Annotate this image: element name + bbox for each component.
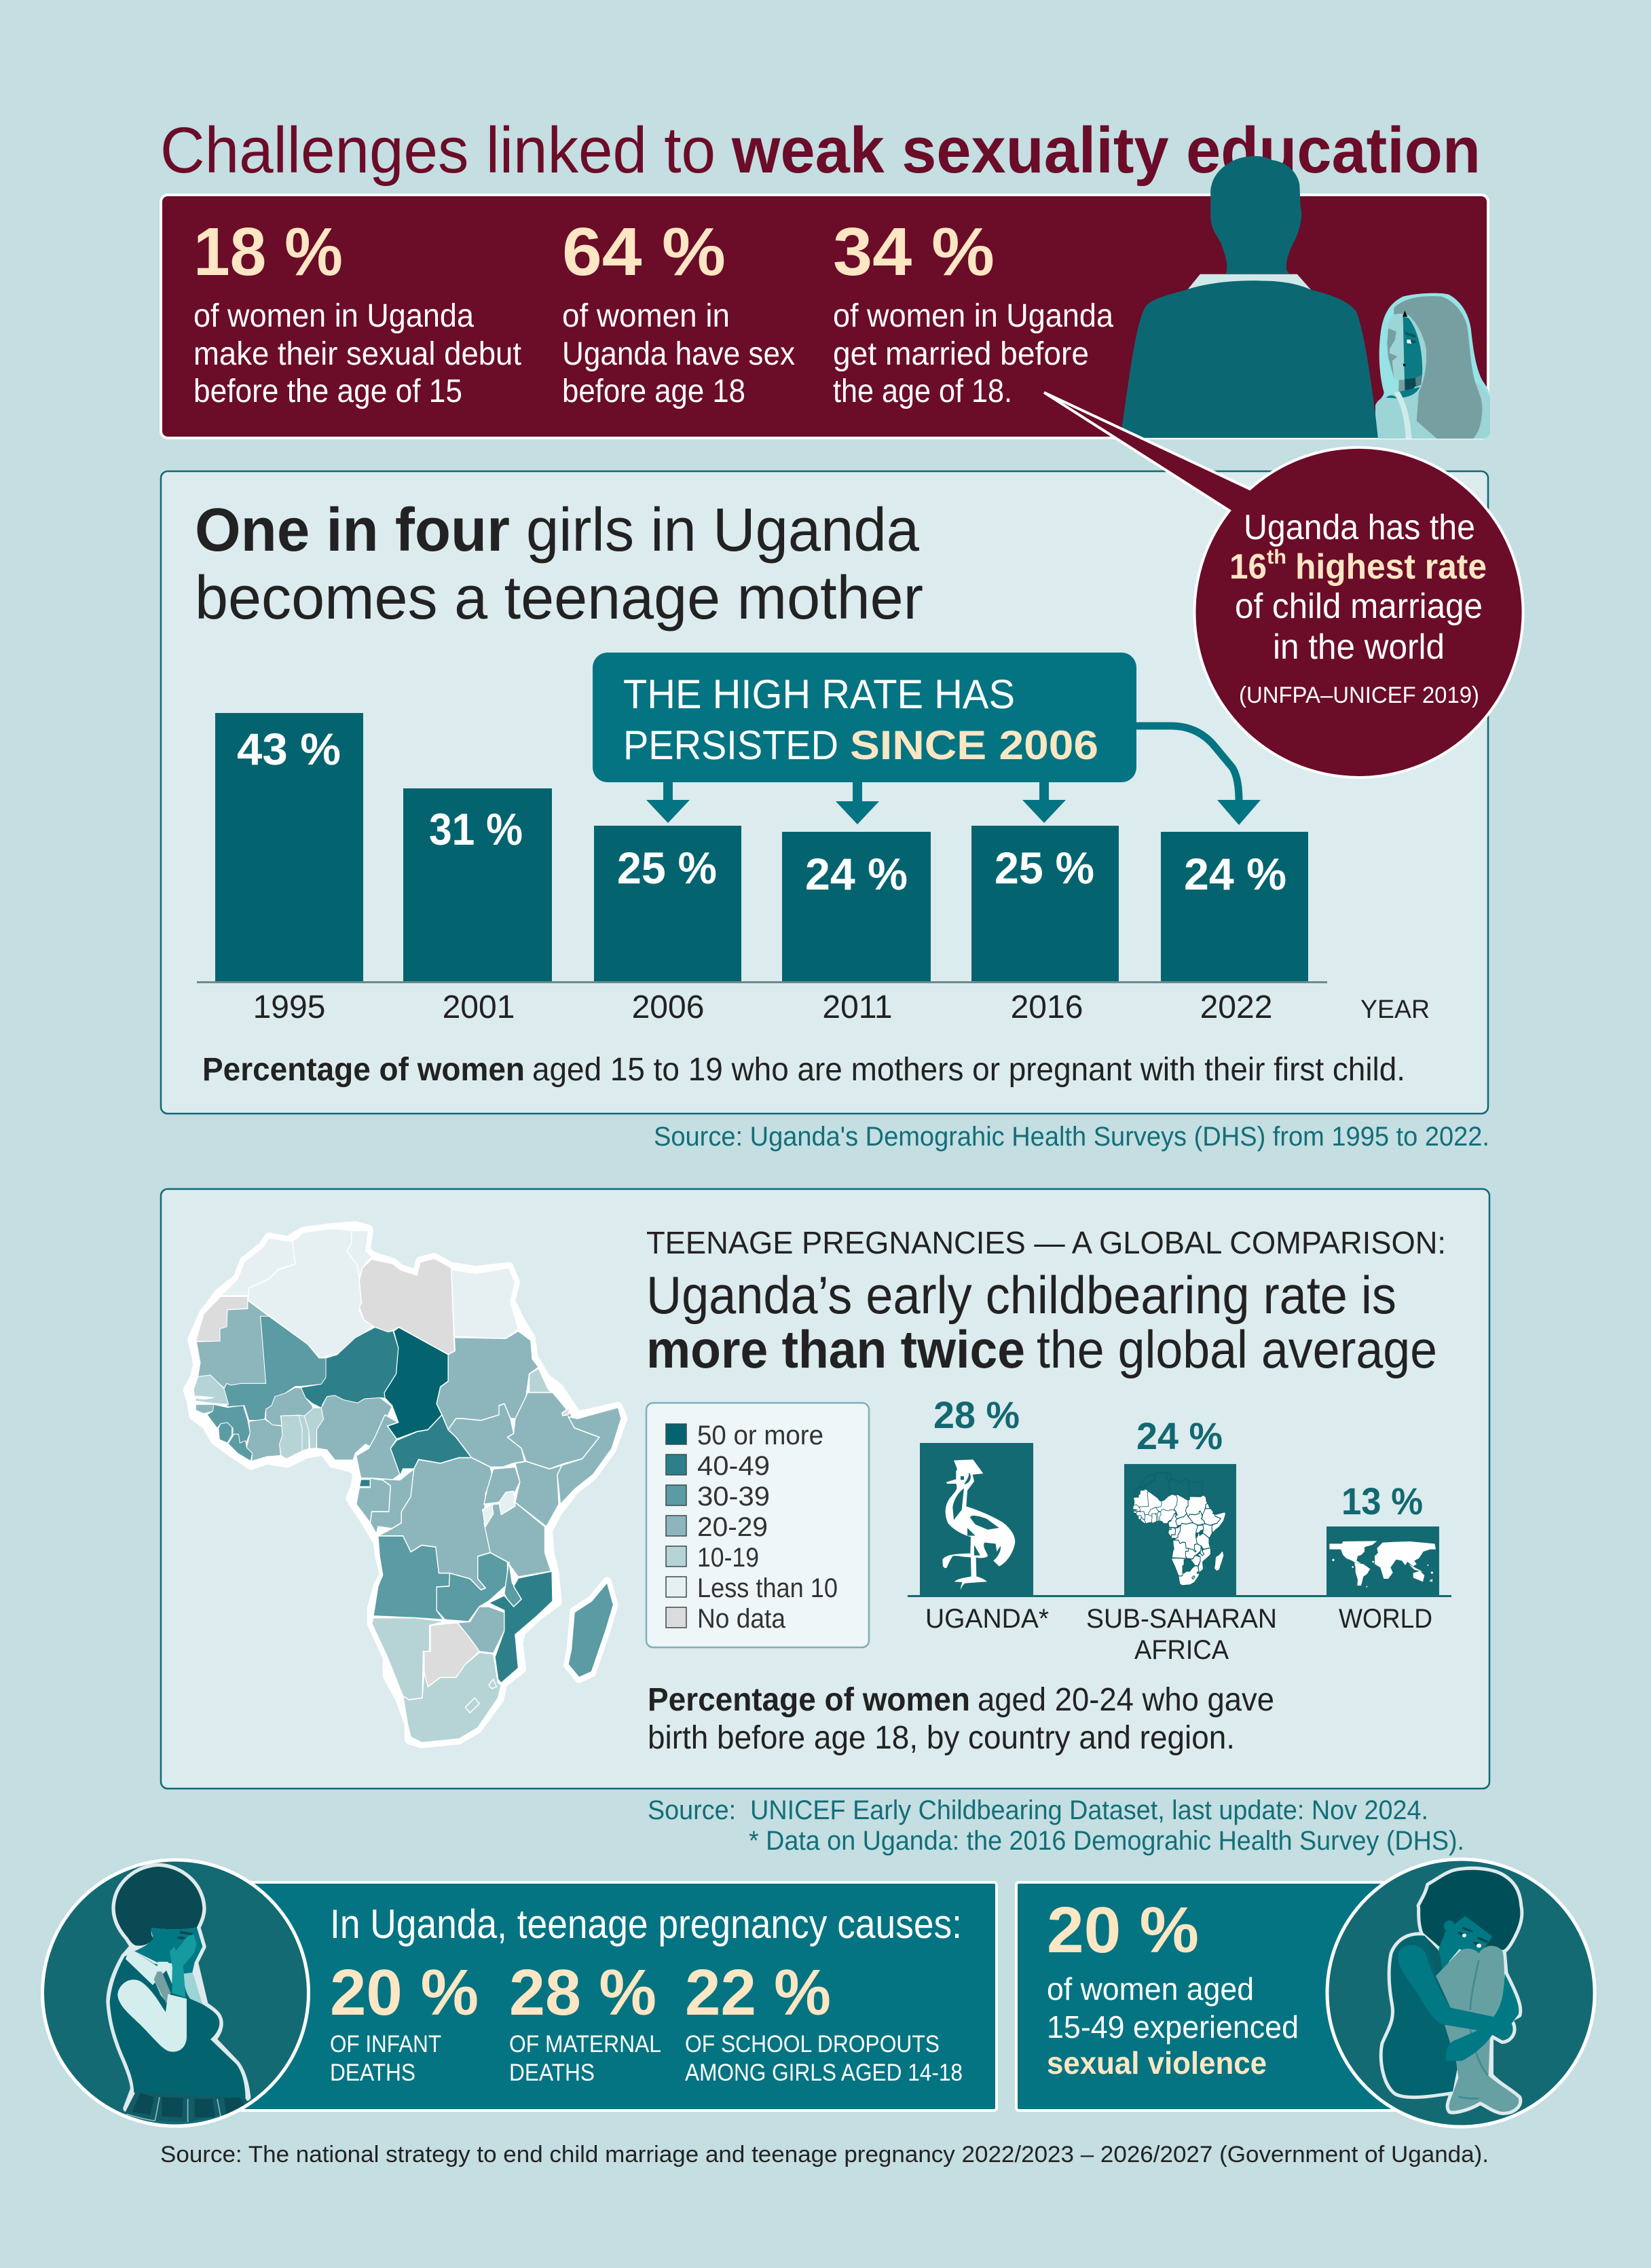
bar chart: 2001 — [443, 989, 515, 1025]
bar chart: 24 % — [1184, 849, 1286, 899]
legend: 10-19 — [697, 1543, 759, 1573]
stat: maternal deaths: 28 % — [509, 1956, 656, 2029]
stat: infant deaths: 20 % — [330, 1956, 479, 2029]
map caption: birth before age 18, by country and region. — [648, 1720, 1235, 1756]
speech bubble: child marriage rank: 16 — [1229, 547, 1267, 587]
bar: world with mini world map — [1327, 1526, 1439, 1596]
heading: global comparison — [646, 1225, 1446, 1379]
legend: 20-29 — [697, 1512, 768, 1542]
speech bubble: child marriage rank — [1044, 392, 1523, 778]
panel: sexual violence: 15-49 experienced — [1047, 2009, 1299, 2045]
stat: infant deaths — [330, 1956, 479, 2086]
map caption: aged 20-24 who gave — [978, 1682, 1274, 1718]
legend: 40-49 — [697, 1451, 770, 1481]
stat: 34 percent: 34 % — [833, 214, 995, 290]
legend: Less than 10 — [697, 1573, 838, 1603]
stat: 34 percent — [833, 214, 1113, 409]
stat: school dropouts: AMONG GIRLS AGED 14-18 — [685, 2060, 963, 2086]
stat: school dropouts: OF SCHOOL DROPOUTS — [685, 2031, 940, 2057]
stat: 18 percent: make their sexual debut — [193, 336, 521, 372]
bar: Uganda with crane — [920, 1443, 1033, 1596]
bar values: 13 % — [1341, 1480, 1423, 1522]
callout: high rate persisted: THE HIGH RATE HAS — [623, 672, 1015, 717]
speech bubble: child marriage rank: in the world — [1273, 627, 1445, 667]
heading: global comparison: Uganda’s early childbearing rate is — [646, 1265, 1396, 1325]
stat: 34 percent: the age of 18. — [833, 373, 1012, 409]
heading: becomes a teenage mother — [195, 564, 923, 632]
callout: high rate persisted — [593, 653, 1136, 782]
bar chart: regional comparison — [908, 1393, 1451, 1665]
icon: crouching woman in circle — [1327, 1859, 1595, 2127]
stat: 34 percent: get married before — [833, 336, 1089, 372]
bar chart: 25 % — [995, 843, 1094, 893]
west Africa countries — [193, 1300, 398, 1461]
stat: 18 percent: 18 % — [193, 214, 343, 290]
callout: high rate persisted: SINCE 2006 — [850, 723, 1098, 768]
bar chart: 2011 — [822, 989, 893, 1025]
legend: 50 or more — [697, 1421, 823, 1450]
speech bubble: child marriage rank: th — [1267, 546, 1286, 568]
panel: sexual violence: 20 % — [1047, 1894, 1199, 1967]
bar values: 24 % — [1136, 1414, 1223, 1457]
heading: One in four — [195, 496, 510, 564]
bar chart: YEAR — [1360, 995, 1430, 1024]
title: weak sexuality education — [731, 114, 1481, 187]
bar chart — [197, 713, 1430, 1025]
stat: 64 percent: Uganda have sex — [562, 336, 795, 372]
heading — [195, 496, 923, 632]
heading: global comparison: the global average — [1037, 1319, 1437, 1379]
stat: maternal deaths — [509, 1956, 661, 2086]
bar values: 28 % — [933, 1393, 1020, 1436]
icon: young girl with veil — [1375, 293, 1490, 439]
callout: high rate persisted: PERSISTED — [623, 723, 838, 768]
speech bubble: child marriage rank: highest rate — [1295, 547, 1487, 587]
chart caption: aged 15 to 19 who are mothers or pregnant with their first child. — [532, 1052, 1405, 1088]
bar chart: 1995 — [253, 989, 325, 1025]
icon: man silhouette — [1121, 156, 1379, 438]
panel: consequences of teenage pregnancy — [204, 1882, 997, 2110]
speech bubble: child marriage rank: of child marriage — [1235, 587, 1483, 626]
bar chart: 25 % — [617, 843, 717, 893]
panel: sexual violence — [1016, 1882, 1437, 2110]
bar chart: 24 % — [805, 849, 908, 899]
stat: school dropouts — [685, 1956, 963, 2086]
stat: school dropouts: 22 % — [685, 1956, 831, 2029]
source: national strategy: Source: The national strategy to end child marriage and teenage pregnancy 2022/2023 – 2026/2027 (Government of Uganda). — [160, 2142, 1489, 2168]
speech bubble: child marriage rank: (UNFPA–UNICEF 2019) — [1239, 682, 1479, 708]
bar labels: WORLD — [1339, 1604, 1432, 1634]
stat: infant deaths: OF INFANT — [330, 2031, 441, 2057]
bar chart: 2006 — [632, 989, 704, 1025]
panel: sexual violence: sexual violence — [1047, 2045, 1267, 2081]
stat: 18 percent: before the age of 15 — [193, 373, 462, 409]
bar chart: 43 % — [237, 724, 341, 774]
bar chart: 2022 — [1200, 989, 1272, 1025]
arrows from callout to bars — [646, 726, 1261, 825]
map caption — [648, 1682, 1274, 1756]
stat: 64 percent — [562, 214, 795, 409]
stat: infant deaths: DEATHS — [330, 2060, 415, 2086]
legend — [646, 1403, 869, 1647]
panel: sexual violence: of women aged — [1047, 1971, 1254, 2007]
chart caption: Percentage of women — [202, 1052, 525, 1088]
panel: global comparison — [161, 1189, 1489, 1789]
title: Challenges linked to — [160, 114, 716, 187]
bar labels: AFRICA — [1134, 1635, 1229, 1665]
bar chart: 31 % — [429, 804, 523, 854]
stat: 34 percent: of women in Uganda — [833, 298, 1113, 334]
bar labels: SUB-SAHARAN — [1086, 1604, 1277, 1634]
title — [160, 114, 1481, 187]
stat: 64 percent: before age 18 — [562, 373, 745, 409]
legend: No data — [697, 1604, 786, 1634]
legend: 30-39 — [697, 1482, 770, 1512]
panel: statistics on early sex and marriage — [161, 195, 1488, 438]
bar: sub-Saharan Africa with mini map — [1124, 1464, 1236, 1596]
stat: maternal deaths: DEATHS — [509, 2060, 595, 2086]
bar labels — [925, 1604, 1432, 1665]
panel: teenage mothers bar chart — [161, 471, 1488, 1114]
stat: maternal deaths: OF MATERNAL — [509, 2031, 661, 2057]
stat: 18 percent: of women in Uganda — [193, 298, 474, 334]
source: UNICEF — [648, 1795, 1464, 1856]
source: DHS: Source: Uganda's Demograhic Health Surveys (DHS) from 1995 to 2022. — [654, 1122, 1489, 1152]
stat: 64 percent: of women in — [562, 298, 730, 334]
bar chart: 2016 — [1011, 989, 1083, 1025]
heading: girls in Uganda — [526, 496, 920, 564]
icon: pregnant schoolgirl in circle — [42, 1860, 308, 2126]
source: UNICEF: Source: UNICEF Early Childbearing Dataset, last update: Nov 2024. — [648, 1795, 1428, 1825]
bar labels: UGANDA* — [925, 1604, 1049, 1634]
bar values — [933, 1393, 1423, 1522]
heading: global comparison: more than twice — [646, 1319, 1025, 1379]
map caption: Percentage of women — [648, 1682, 970, 1718]
source: UNICEF: * Data on Uganda: the 2016 Demograhic Health Survey (DHS). — [749, 1826, 1464, 1856]
map: Africa early childbearing — [188, 1227, 623, 1742]
stat: 18 percent — [193, 214, 521, 409]
panel heading: In Uganda, teenage pregnancy causes: — [330, 1901, 962, 1947]
stat: 64 percent: 64 % — [562, 214, 726, 290]
heading: global comparison: TEENAGE PREGNANCIES — A GLOBAL COMPARISON: — [646, 1225, 1446, 1260]
speech bubble: child marriage rank: Uganda has the — [1244, 508, 1475, 547]
